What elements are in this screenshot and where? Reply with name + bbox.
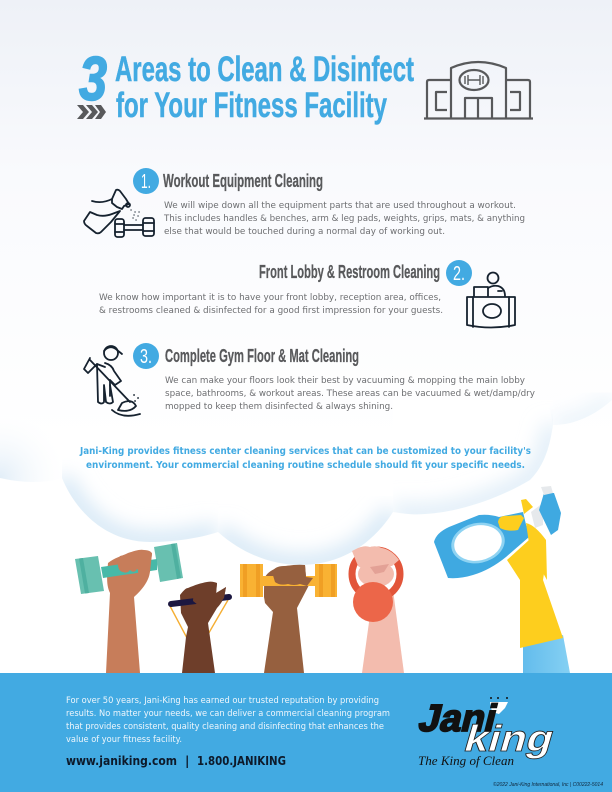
copyright: ©2022 Jani-King International, Inc | C00222-5014 xyxy=(493,781,603,788)
illustration: raised hands xyxy=(75,486,570,673)
crown xyxy=(490,697,508,714)
body text: We know how important it is to have your front lobby, reception area, offices, xyxy=(99,292,441,303)
body text xyxy=(163,200,525,237)
contact line: www.janiking.com xyxy=(66,754,177,768)
body text xyxy=(165,375,536,412)
footer text: results. No matter your needs, we can deliver a commercial cleaning program xyxy=(66,708,390,719)
number badge 2 xyxy=(446,260,472,286)
icon: person mopping xyxy=(84,346,140,416)
title line 1: Areas to Clean & Disinfect xyxy=(115,50,414,89)
number badge 3 xyxy=(133,343,159,369)
heading: Front Lobby & Restroom Cleaning xyxy=(259,262,440,282)
background xyxy=(0,0,612,440)
callout: Jani-King provides fitness center cleaning services that can be customized to your facility's xyxy=(79,446,531,457)
callout xyxy=(79,446,531,471)
heading: Complete Gym Floor & Mat Cleaning xyxy=(165,346,359,366)
hand with resistance band xyxy=(170,582,229,673)
panel: workout equipment cleaning xyxy=(84,168,525,237)
big numeral 3: 3 xyxy=(79,45,107,114)
footer text xyxy=(66,695,390,768)
body text: This includes handles & benches, arm & leg pads, weights, grips, mats, & anything xyxy=(163,213,525,224)
hand with kettlebell xyxy=(352,546,404,673)
body text: & restrooms cleaned & disinfected for a good first impression for your guests. xyxy=(99,305,443,316)
logo: Jani-King xyxy=(415,697,560,768)
panel: complete gym floor and mat cleaning xyxy=(84,343,536,416)
tagline: The King of Clean xyxy=(418,753,514,768)
footer text: For over 50 years, Jani-King has earned our trusted reputation by providing xyxy=(66,695,379,706)
body text: We will wipe down all the equipment parts that are used throughout a workout. xyxy=(164,200,516,211)
title line 2: for Your Fitness Facility xyxy=(116,86,387,125)
number badge 1: 1. xyxy=(141,171,151,193)
heading: Workout Equipment Cleaning xyxy=(163,171,323,191)
callout: environment. Your commercial cleaning routine schedule should fit your specific needs. xyxy=(86,460,525,471)
icon: gym building xyxy=(424,62,533,118)
number badge 3: 3. xyxy=(140,346,152,368)
body text: else that would be touched during a normal day of working out. xyxy=(164,226,445,237)
icon: reception desk xyxy=(467,272,515,328)
icon: chevrons xyxy=(77,105,106,119)
panel: front lobby and restroom cleaning xyxy=(99,260,515,328)
footer band xyxy=(0,673,612,792)
title xyxy=(79,45,414,125)
body text xyxy=(99,292,443,316)
contact line xyxy=(66,754,286,768)
contact line: 1.800.JANIKING xyxy=(197,754,286,768)
cloud xyxy=(0,400,612,570)
number badge 2: 2. xyxy=(453,263,465,285)
king wordmark: king xyxy=(460,718,560,759)
number badge 1 xyxy=(133,168,159,194)
contact line: | xyxy=(185,754,189,768)
icon: spray bottle and dumbbell xyxy=(84,190,154,237)
Jani wordmark: Jani xyxy=(415,698,501,740)
gloved hand with spray bottle xyxy=(434,486,570,673)
hand with orange dumbbell xyxy=(240,564,337,673)
body text: We can make your floors look their best by vacuuming & mopping the main lobby xyxy=(165,375,526,386)
body text: mopped to keep them disinfected & always shining. xyxy=(165,401,393,412)
hand with teal dumbbell xyxy=(75,543,183,673)
body text: space, bathrooms, & workout areas. These areas can be vacuumed & wet/damp/dry xyxy=(165,388,536,399)
footer text: that provides consistent, quality cleaning and disinfecting that enhances the xyxy=(66,721,384,732)
footer text: value of your fitness facility. xyxy=(66,734,182,745)
